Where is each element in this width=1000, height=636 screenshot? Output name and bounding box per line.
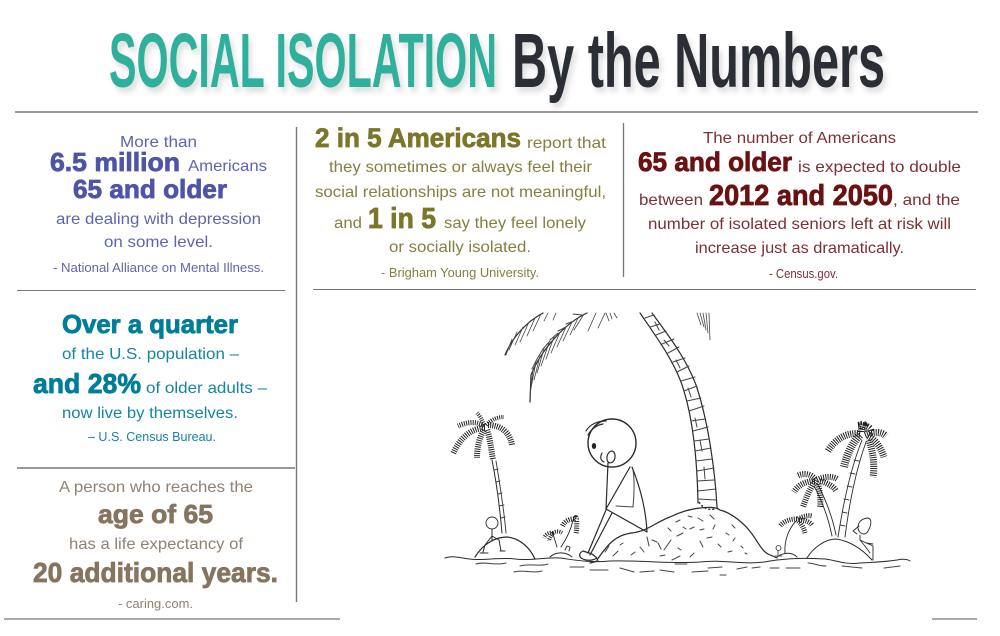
panel: depression statistic: Americans (188, 158, 267, 175)
panel: living alone statistic: and 28% (33, 368, 141, 399)
icon: main sand island (597, 502, 777, 560)
panel: loneliness statistic: - Brigham Young University. (381, 265, 539, 280)
illustration: stick figures on desert islands (445, 313, 910, 575)
panel: loneliness statistic: and (334, 215, 362, 232)
panel: living alone statistic (33, 309, 267, 444)
panel: life expectancy statistic: 20 additional years. (33, 557, 278, 588)
panel: population growth statistic: is expected to double (798, 159, 961, 176)
panel: living alone statistic: of older adults – (146, 380, 267, 397)
panel: loneliness statistic: report that (527, 135, 607, 152)
panel: population growth statistic: number of isolated seniors left at risk will (648, 216, 951, 233)
panel: depression statistic: - National Alliance on Mental Illness. (53, 260, 264, 275)
panel: loneliness statistic: or socially isolated. (389, 239, 531, 256)
panel: depression statistic: 6.5 million (50, 147, 180, 177)
panel: depression statistic: More than (120, 134, 197, 151)
title: SOCIAL ISOLATION (109, 18, 497, 104)
panel: living alone statistic: of the U.S. population – (62, 346, 239, 363)
panel: population growth statistic: increase just as dramatically. (695, 240, 904, 257)
panel: population growth statistic: , and the (893, 192, 960, 209)
panel: loneliness statistic: social relationships are not meaningful, (315, 184, 606, 201)
panel: living alone statistic: – U.S. Census Bureau. (88, 429, 216, 444)
panel: population growth statistic: The number of Americans (703, 130, 896, 147)
panel: loneliness statistic: 2 in 5 Americans (315, 123, 521, 153)
panel: depression statistic: 65 and older (73, 174, 227, 204)
panel: life expectancy statistic: A person who reaches the (59, 479, 253, 496)
icon: left island with palm and small figure (453, 413, 535, 559)
panel: population growth statistic (638, 130, 961, 281)
panel: population growth statistic: 65 and older (638, 147, 792, 177)
panel: population growth statistic: - Census.gov. (769, 266, 838, 281)
panel: loneliness statistic: they sometimes or always feel their (329, 159, 593, 176)
panel: population growth statistic: 2012 and 2050 (709, 180, 893, 212)
icon: small center palm island (544, 518, 577, 557)
panel: population growth statistic: between (639, 192, 703, 209)
icon: right islands with palms and figures (775, 425, 886, 560)
icon: main stick figure (580, 419, 647, 563)
panel: living alone statistic: now live by themselves. (62, 405, 238, 422)
icon: water waves (445, 557, 910, 575)
panel: life expectancy statistic: has a life expectancy of (69, 536, 244, 553)
panel: life expectancy statistic: - caring.com. (118, 596, 193, 611)
panel: loneliness statistic (315, 123, 607, 280)
icon: large palm tree (505, 313, 717, 507)
panel: life expectancy statistic (33, 479, 278, 611)
panel: depression statistic (50, 134, 267, 275)
panel: depression statistic: are dealing with depression (56, 211, 261, 228)
panel: life expectancy statistic: age of 65 (98, 499, 213, 529)
panel: living alone statistic: Over a quarter (62, 309, 238, 339)
panel: loneliness statistic: say they feel lonely (444, 215, 586, 232)
panel: loneliness statistic: 1 in 5 (368, 203, 436, 235)
panel: depression statistic: on some level. (104, 234, 213, 251)
